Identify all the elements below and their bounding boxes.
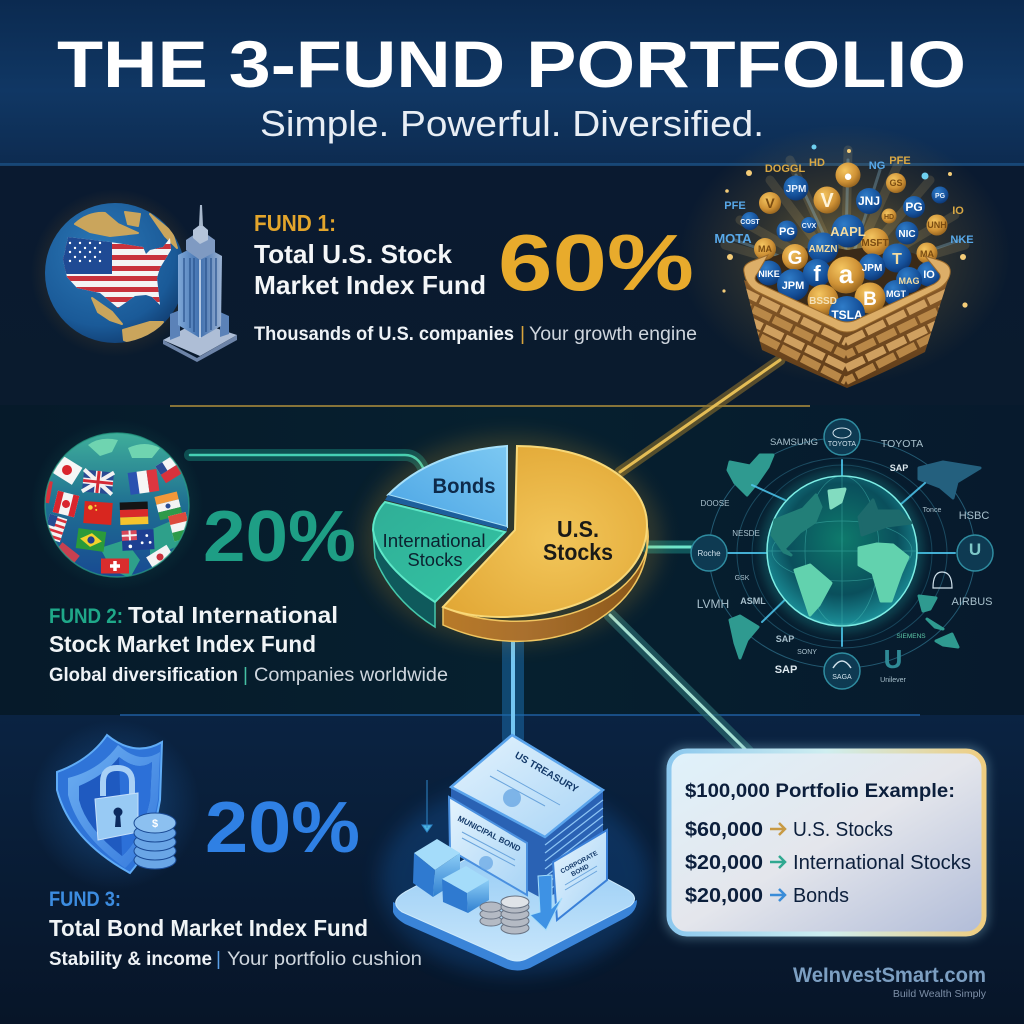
fund 1 name bbox=[254, 239, 486, 300]
fund 3 description: | bbox=[216, 949, 221, 970]
title: THE 3-FUND PORTFOLIO bbox=[57, 27, 966, 101]
fund 2 description bbox=[49, 665, 448, 686]
floating continents bbox=[728, 455, 980, 658]
connection beams bbox=[727, 460, 955, 646]
icon: US globe with skyscraper bbox=[31, 189, 237, 362]
fund 1 label: FUND 1: bbox=[254, 210, 336, 236]
icon: flag globe bbox=[42, 431, 191, 580]
icon: shield with lock and coins: $ bbox=[152, 818, 158, 830]
company names: SAP bbox=[776, 634, 794, 644]
flags bbox=[40, 454, 192, 574]
tickers: HD bbox=[809, 157, 825, 169]
company names: DOOSE bbox=[701, 499, 729, 508]
subtitle: Simple. Powerful. Diversified. bbox=[260, 103, 764, 144]
municipal bond certificate bbox=[449, 797, 527, 895]
coins: COST bbox=[740, 219, 760, 226]
icon: world network globe: SAGA bbox=[832, 674, 852, 681]
brand footer bbox=[793, 964, 987, 1000]
row: bonds: $20,000 bbox=[685, 884, 763, 907]
company names: SAP bbox=[775, 664, 797, 676]
coins: MA bbox=[920, 249, 934, 259]
shell logo bbox=[933, 572, 952, 588]
brand footer: Build Wealth Simply bbox=[893, 988, 987, 1000]
coins: JNJ bbox=[858, 194, 880, 208]
coins: AAPL bbox=[830, 224, 866, 239]
fund 2 description: Companies worldwide bbox=[254, 665, 448, 686]
slice: international stocks: International bbox=[382, 531, 486, 551]
slice: international stocks: Stocks bbox=[408, 550, 462, 570]
coins: V bbox=[820, 190, 834, 212]
fund 3 description: Stability & income bbox=[49, 949, 212, 970]
coins: ● bbox=[843, 168, 853, 185]
slice: US stocks: U.S. bbox=[557, 516, 599, 542]
fund 1 name: Total U.S. Stock bbox=[254, 239, 453, 269]
basket back rim bbox=[748, 247, 945, 320]
silver coins bbox=[480, 896, 529, 934]
brand footer: WeInvestSmart.com bbox=[793, 964, 986, 987]
fund 2 name: Stock Market Index Fund bbox=[49, 631, 316, 657]
company names: SAP bbox=[890, 463, 908, 473]
coins: HD bbox=[884, 214, 894, 221]
company names: LVMH bbox=[697, 597, 729, 611]
bond stack bbox=[449, 735, 607, 920]
US flag map bbox=[63, 237, 171, 308]
coins: PG bbox=[935, 193, 946, 200]
globe sphere bbox=[760, 469, 924, 633]
company names: TOYOTA bbox=[881, 438, 923, 450]
panel: fund 3 text bbox=[49, 788, 422, 970]
coins: BSSD bbox=[809, 296, 837, 307]
callout: portfolio example bbox=[664, 746, 989, 939]
panel: fund 2 text bbox=[49, 497, 448, 686]
fund 3 description bbox=[49, 949, 422, 970]
coins: PG bbox=[905, 200, 923, 214]
icon: world network globe: TOYOTA bbox=[828, 441, 856, 448]
pie chart bbox=[362, 435, 662, 645]
company names: U bbox=[884, 644, 902, 674]
fund 3 name bbox=[49, 888, 368, 941]
fund 2 name: Total International bbox=[128, 602, 338, 628]
sparkles bbox=[722, 149, 968, 308]
us treasury certificate bbox=[451, 735, 603, 837]
basket body bbox=[740, 280, 952, 388]
slice: US stocks: Stocks bbox=[543, 539, 613, 565]
fund 2 description: Global diversification bbox=[49, 665, 238, 686]
row: international stocks: International Stocks bbox=[793, 851, 971, 874]
tickers: PFE bbox=[889, 155, 911, 167]
company names: SAMSUNG bbox=[770, 437, 818, 448]
coins: JPM bbox=[782, 280, 804, 292]
coins: JPM bbox=[786, 184, 806, 195]
fund 1 description: Thousands of U.S. companies bbox=[254, 323, 514, 345]
tickers: PFE bbox=[724, 200, 746, 212]
corporate bond certificate bbox=[553, 830, 607, 920]
tickers: IO bbox=[952, 205, 964, 217]
bond stack: BOND bbox=[570, 863, 591, 878]
coins: MGT bbox=[886, 289, 906, 299]
company names: SIEMENS bbox=[896, 633, 926, 640]
icon: bonds on platform bbox=[380, 735, 650, 975]
platform bbox=[393, 900, 637, 970]
company nodes bbox=[691, 419, 993, 689]
slice: US stocks bbox=[443, 446, 648, 641]
row: US stocks: $60,000 bbox=[685, 818, 763, 841]
coin stack bbox=[134, 813, 176, 869]
fund 3 name: Total Bond Market Index Fund bbox=[49, 915, 368, 941]
coins: f bbox=[813, 261, 821, 286]
coins: B bbox=[863, 289, 877, 310]
fund 2 description: | bbox=[243, 665, 248, 686]
coins: CVX bbox=[802, 223, 817, 230]
icon: shield with lock and coins bbox=[30, 720, 200, 890]
fund 1 description: Your growth engine bbox=[529, 323, 697, 345]
fund 1 description bbox=[254, 323, 697, 345]
bond stack: MUNICIPAL BOND bbox=[456, 814, 522, 854]
coins: GS bbox=[889, 178, 903, 188]
company names bbox=[697, 437, 992, 684]
fund 2 name bbox=[49, 602, 338, 657]
slice: bonds: Bonds bbox=[432, 475, 496, 498]
company names: NESDE bbox=[732, 529, 760, 538]
panel: fund 1 text bbox=[254, 210, 697, 345]
rays bbox=[725, 150, 965, 280]
callout heading: $100,000 Portfolio Example: bbox=[685, 780, 955, 802]
company names: SONY bbox=[797, 649, 817, 656]
coins: T bbox=[892, 251, 902, 268]
tickers: NG bbox=[869, 160, 885, 172]
company names: AIRBUS bbox=[952, 596, 992, 608]
coins: NIC bbox=[898, 229, 916, 240]
small arrow bbox=[422, 780, 432, 832]
row: bonds: Bonds bbox=[793, 884, 849, 907]
connector lines bbox=[190, 360, 780, 752]
padlock bbox=[95, 768, 138, 840]
cubes bbox=[413, 839, 489, 913]
bond stack: US TREASURY bbox=[513, 750, 580, 796]
tickers bbox=[714, 155, 974, 246]
slice: bonds bbox=[385, 446, 507, 531]
skyscraper bbox=[163, 205, 237, 362]
bond stack: CORPORATE bbox=[560, 850, 600, 875]
slice: international stocks bbox=[373, 502, 505, 627]
20 percent bonds: 20% bbox=[205, 788, 360, 868]
company names: Unilever bbox=[880, 677, 907, 684]
icon: world network globe: Roche bbox=[697, 549, 721, 558]
coins: NIKE bbox=[758, 269, 780, 279]
coins: AMZN bbox=[809, 244, 837, 255]
fund 1 description: | bbox=[520, 323, 525, 345]
icon: basket of stocks bbox=[698, 139, 993, 388]
coins: TSLA bbox=[831, 308, 863, 322]
coins: G bbox=[788, 248, 802, 269]
row: US stocks bbox=[685, 818, 893, 841]
company names: ASML bbox=[740, 596, 766, 606]
20 percent international: 20% bbox=[203, 497, 356, 577]
tickers: DOGGL bbox=[765, 163, 805, 175]
icon: world network globe bbox=[691, 419, 993, 689]
coins: PG bbox=[779, 226, 795, 238]
coins: V bbox=[765, 195, 775, 211]
down arrow bbox=[530, 875, 562, 930]
coins: MSFT bbox=[861, 238, 889, 249]
orbit rings bbox=[709, 438, 975, 668]
60 percent: 60% bbox=[498, 218, 694, 307]
fund 1 name: Market Index Fund bbox=[254, 270, 486, 300]
coins: MAG bbox=[898, 276, 920, 286]
coins bbox=[740, 162, 948, 332]
coins: MA bbox=[758, 244, 772, 254]
coins: JPM bbox=[862, 263, 882, 274]
coins: IO bbox=[923, 269, 935, 281]
basket rim bbox=[744, 255, 950, 332]
row: international stocks bbox=[685, 851, 971, 874]
fund 2 name: FUND 2: bbox=[49, 605, 123, 628]
row: US stocks: U.S. Stocks bbox=[793, 818, 893, 841]
company names: HSBC bbox=[959, 510, 989, 522]
tickers: MOTA bbox=[714, 231, 752, 246]
fund 3 description: Your portfolio cushion bbox=[227, 949, 422, 970]
row: bonds bbox=[685, 884, 849, 907]
company names: Tonce bbox=[923, 507, 941, 514]
icon: world network globe: U bbox=[969, 540, 981, 559]
coins: UNH bbox=[927, 220, 947, 230]
row: international stocks: $20,000 bbox=[685, 851, 763, 874]
tickers: NKE bbox=[950, 234, 974, 246]
fund 3 name: FUND 3: bbox=[49, 888, 121, 911]
company names: GSK bbox=[735, 575, 750, 582]
coins: a bbox=[839, 259, 854, 289]
